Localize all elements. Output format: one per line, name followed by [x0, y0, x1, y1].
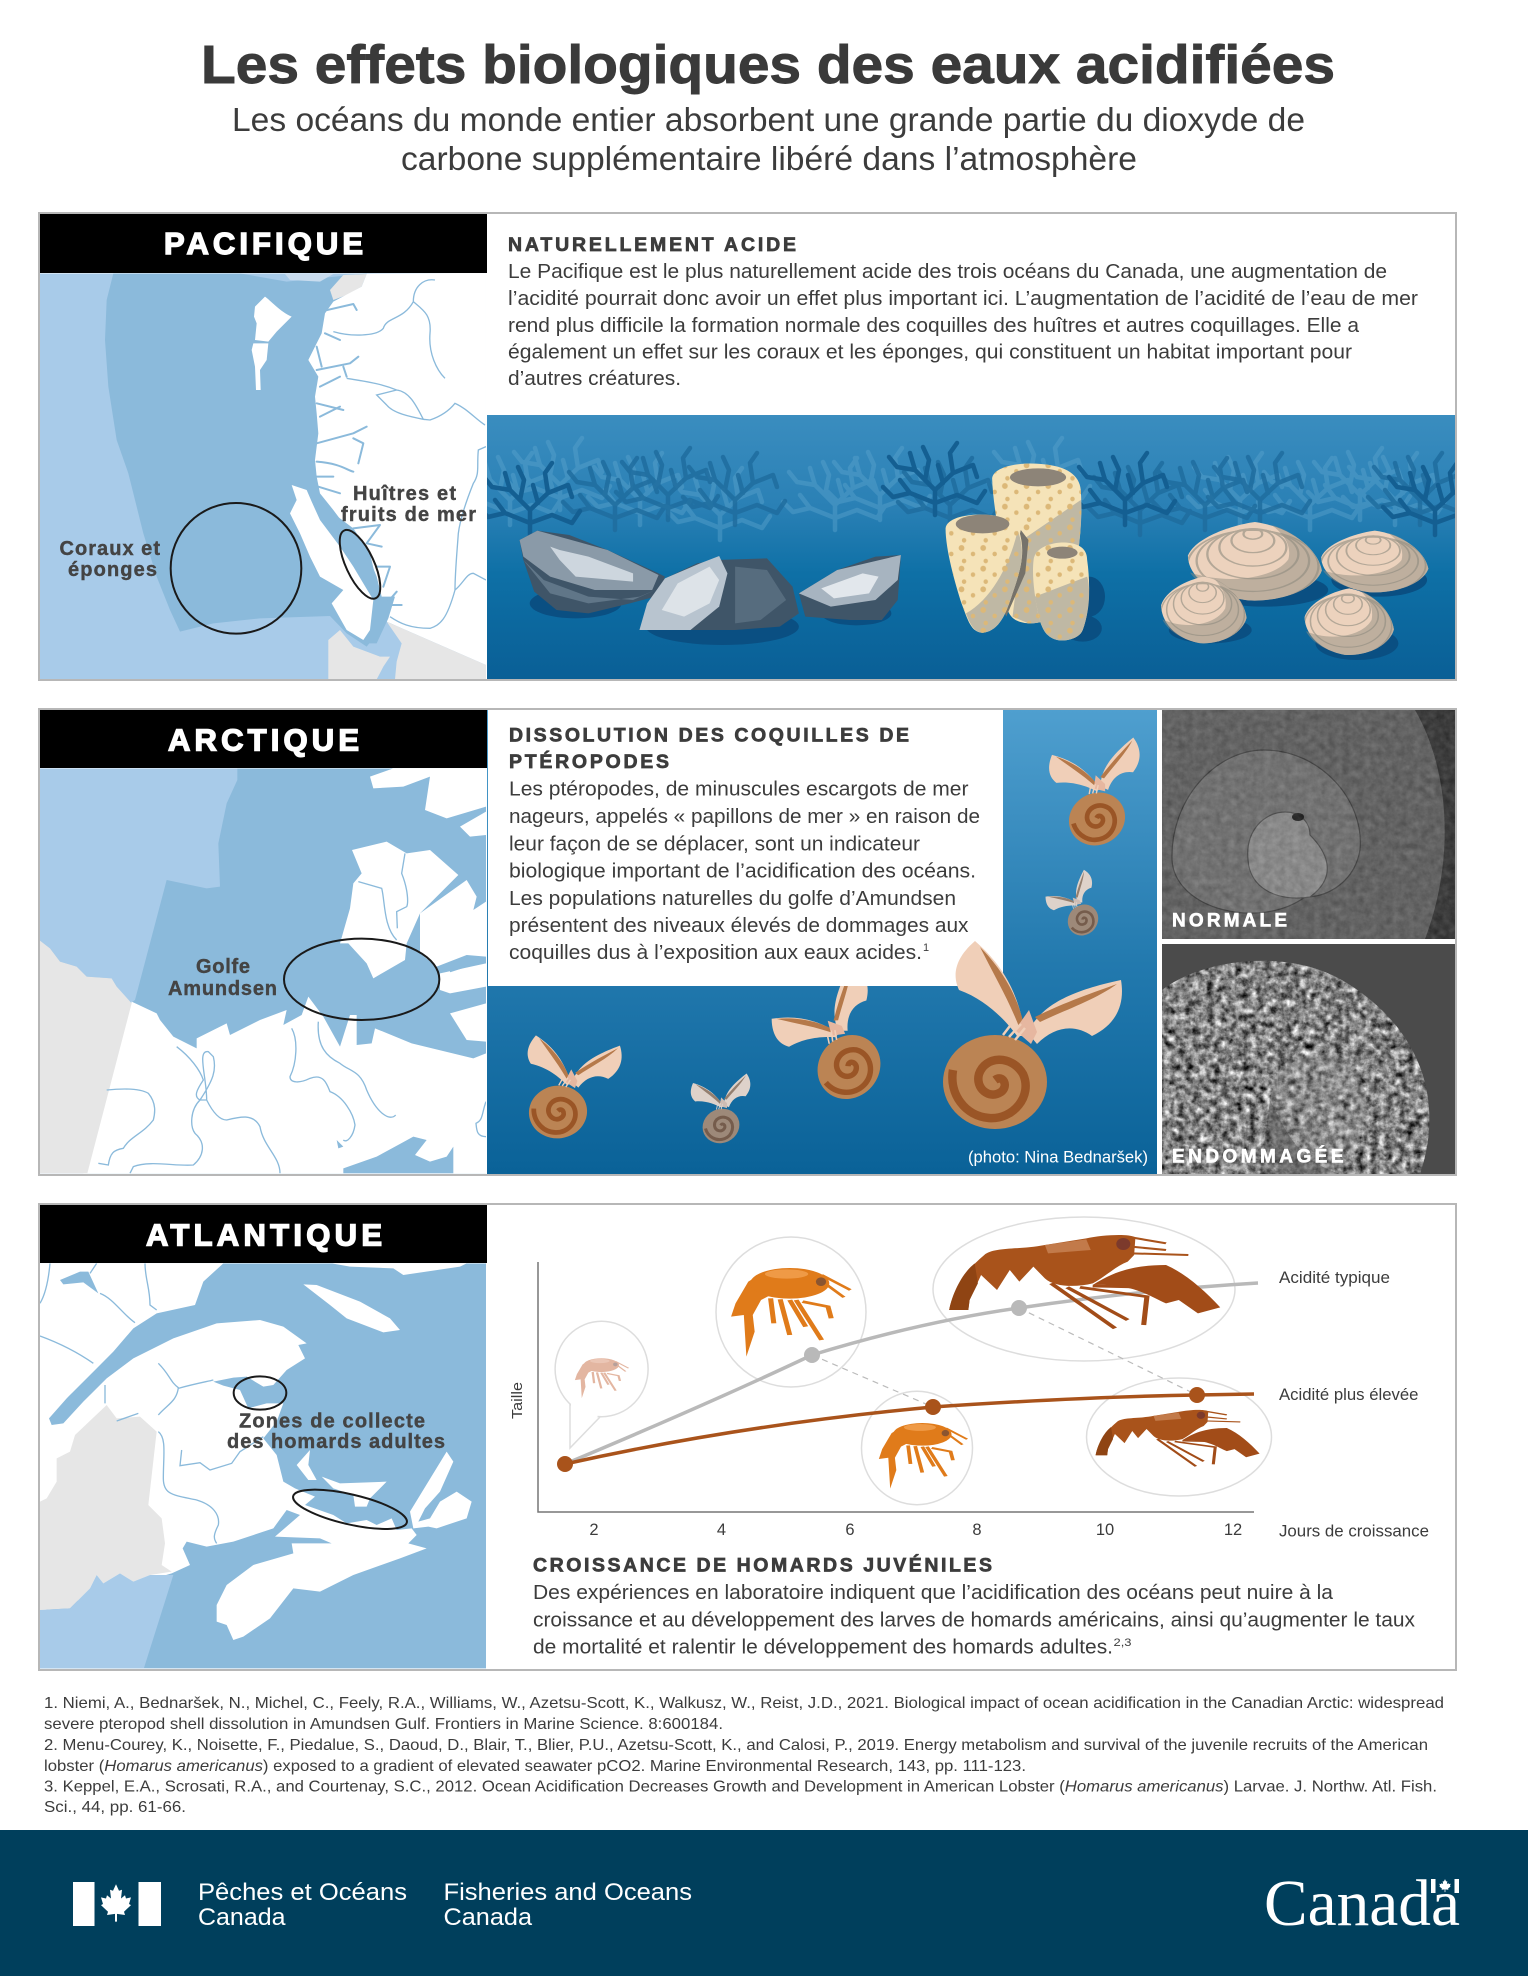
x axis label: Jours de croissance — [1279, 1522, 1429, 1540]
header: PACIFIQUE: PACIFIQUE — [164, 226, 363, 261]
title: Les effets biologiques des eaux acidifiées — [201, 35, 1335, 95]
references: 1. Niemi, A., Bednaršek, N., Michel, C., Feely, R.A., Williams, W., Azetsu-Scott, K., Walkusz, W., Reist, J.D., 2021. Biological impact of ocean acidification in the Canadian Arctic: widespread — [44, 1695, 1444, 1712]
text block: Arctique: nageurs, appelés « papillons de mer » en raison de — [509, 806, 980, 828]
heading: dissolution: DISSOLUTION DES COQUILLES DE — [509, 724, 909, 746]
text block: Arctique: Les ptéropodes, de minuscules escargots de mer — [509, 778, 969, 800]
label: coraux et éponges — [60, 538, 160, 581]
text block: Atlantique: 2,3 — [1114, 1637, 1132, 1649]
line: typical acidity — [565, 1283, 1258, 1464]
dashed connectors — [812, 1308, 1197, 1407]
illustration: pteropods background — [487, 710, 1157, 1174]
heading: naturellement acide: NATURELLEMENT ACIDE — [508, 234, 796, 256]
caption: photo credit: (photo: Nina Bednaršek) — [968, 1148, 1148, 1166]
text block: Arctique: 1 — [923, 942, 929, 954]
label: golfe Amundsen: Golfe — [196, 956, 250, 978]
illustration: oysters, sponges and clams — [458, 415, 1485, 680]
panel border — [39, 1204, 1456, 1670]
heading: dissolution — [509, 724, 909, 773]
label: huîtres et fruits de mer: Huîtres et — [353, 483, 456, 505]
label: huîtres et fruits de mer: fruits de mer — [341, 504, 476, 526]
panel: Arctique — [39, 709, 1456, 1175]
header: ATLANTIQUE — [40, 1205, 487, 1263]
label: huîtres et fruits de mer — [341, 483, 476, 526]
map: Pacific coast — [40, 273, 486, 679]
panel: Atlantique — [39, 1204, 1456, 1670]
map: Atlantic Canada — [40, 1263, 486, 1670]
legend: higher acidity: Acidité plus élevée — [1279, 1386, 1418, 1404]
references: 2. Menu-Courey, K., Noisette, F., Piedalue, S., Daoud, D., Blair, T., Blier, P.U., Azetsu-Scott, K., and Calosi, P., 2019. Energy metabolism and survival of the juvenile recruits of the American — [44, 1737, 1428, 1754]
label: endommagée: ENDOMMAGÉE — [1172, 1146, 1344, 1168]
text panel: pteropods — [488, 710, 1003, 986]
x axis ticks: 8 — [972, 1521, 982, 1539]
references — [44, 1695, 1444, 1816]
bubble: lobster acid — [1086, 1378, 1272, 1496]
x axis ticks: 12 — [1224, 1521, 1242, 1539]
text: department English: Canada — [444, 1904, 532, 1931]
icon: pteropod large — [943, 941, 1122, 1129]
references: severe pteropod shell dissolution in Amundsen Gulf. Frontiers in Marine Science. 8:600184. — [44, 1716, 723, 1733]
icon: pteropod upper right — [1036, 718, 1171, 855]
footer band — [0, 1830, 1528, 1976]
label: normale: NORMALE — [1172, 910, 1287, 932]
chart: lobster growth — [509, 1217, 1429, 1540]
icon: Canadian flag — [73, 1882, 161, 1926]
panel border — [39, 709, 1456, 1175]
legend: typical acidity: Acidité typique — [1279, 1269, 1390, 1287]
subtitle — [232, 102, 1305, 178]
header: ARCTIQUE: ARCTIQUE — [168, 722, 359, 758]
text: department English — [444, 1879, 692, 1931]
references: Sci., 44, pp. 61-66. — [44, 1799, 186, 1816]
text block: Atlantique: croissance et au développement des larves de homards américains, ainsi qu’augmenter le taux — [533, 1610, 1415, 1632]
references: lobster (Homarus americanus ) exposed to a gradient of elevated seawater pCO2. Marine Environmental Research, 143, pp. 111-123. — [44, 1758, 1026, 1775]
text block: Pacifique — [508, 261, 1418, 390]
sponges — [946, 463, 1105, 642]
text block: Pacifique: également un effet sur les coraux et les éponges, qui constituent un habitat important pour — [508, 342, 1352, 364]
text block: Arctique: coquilles dus à l’exposition aux eaux acides. — [509, 942, 922, 964]
text block: Pacifique: l’acidité pourrait donc avoir un effet plus important ici. L’augmentation de l’acidité de l’eau de mer — [508, 288, 1418, 310]
label: golfe Amundsen: Amundsen — [168, 978, 277, 1000]
x axis ticks: 6 — [845, 1521, 855, 1539]
icon: pteropod lower left — [518, 1024, 632, 1142]
references: 3. Keppel, E.A., Scrosati, R.A., and Courtenay, S.C., 2012. Ocean Acidification Decreases Growth and Development in American Lobster ( Homarus americanus ) Larvae. J. Northw. Atl. Fish. — [44, 1778, 1437, 1796]
bubble: lobster typical — [933, 1217, 1235, 1361]
illustration: lobster large — [949, 1235, 1220, 1328]
bubble: juvenile acid — [862, 1391, 972, 1505]
x axis ticks: 2 — [589, 1521, 599, 1539]
map: Amundsen Gulf — [40, 768, 486, 1173]
text block: Atlantique: de mortalité et ralentir le développement des homards adultes. — [533, 1636, 1113, 1658]
panel: Pacifique — [39, 213, 1485, 680]
subtitle: Les océans du monde entier absorbent une grande partie du dioxyde de — [232, 102, 1305, 139]
heading: croissance: CROISSANCE DE HOMARDS JUVÉNILES — [533, 1554, 992, 1576]
text block: Arctique: Les populations naturelles du golfe d’Amundsen — [509, 888, 956, 910]
icon: pteropod small lower — [683, 1061, 770, 1149]
text block: Pacifique: Le Pacifique est le plus naturellement acide des trois océans du Canada, une augmentation de — [508, 261, 1387, 283]
header: PACIFIQUE — [40, 214, 487, 273]
heading: dissolution: PTÉROPODES — [509, 750, 669, 773]
text: department French: Pêches et Océans — [198, 1879, 407, 1906]
bubble: larva — [555, 1321, 648, 1448]
oysters — [520, 531, 901, 645]
text block: Arctique: présentent des niveaux élevés de dommages aux — [509, 915, 968, 937]
text block: Arctique — [509, 778, 980, 964]
text block: Pacifique: rend plus difficile la formation normale des coquilles des huîtres et autres coquillages. Elle a — [508, 315, 1360, 337]
icon: pteropod middle — [758, 947, 924, 1112]
x axis ticks: 4 — [717, 1521, 726, 1539]
text block: Arctique: biologique important de l’acidification des océans. — [509, 860, 976, 882]
photo: damaged shell — [1162, 944, 1455, 1174]
clams — [1161, 522, 1428, 660]
text: department French: Canada — [198, 1904, 286, 1931]
photo: normal shell — [1162, 710, 1455, 939]
wordmark: Canada: Canada — [1264, 1867, 1460, 1940]
bubble: juvenile typical — [716, 1237, 866, 1387]
label: coraux et éponges: Coraux et — [60, 538, 160, 560]
text: department French — [198, 1879, 407, 1931]
points — [557, 1300, 1205, 1472]
header: ARCTIQUE — [40, 710, 487, 768]
text block: Atlantique — [533, 1582, 1415, 1658]
label: zones de collecte: Zones de collecte — [239, 1410, 425, 1432]
label: coraux et éponges: éponges — [68, 559, 157, 581]
label: golfe Amundsen — [168, 956, 277, 1000]
y axis label: Taille — [509, 1382, 526, 1419]
x axis ticks: 10 — [1096, 1521, 1114, 1539]
text block: Arctique: leur façon de se déplacer, sont un indicateur — [509, 834, 920, 856]
line: higher acidity — [565, 1394, 1254, 1464]
x axis ticks — [589, 1521, 1242, 1539]
subtitle: carbone supplémentaire libéré dans l’atmosphère — [401, 141, 1137, 178]
text: department English: Fisheries and Oceans — [444, 1879, 692, 1906]
text block: Pacifique: d’autres créatures. — [508, 368, 681, 390]
text block: Atlantique: Des expériences en laboratoire indiquent que l’acidification des océans peut nuire à la — [533, 1582, 1334, 1604]
panel border — [39, 213, 1456, 680]
icon: pteropod small upper — [1039, 862, 1119, 942]
header: ATLANTIQUE: ATLANTIQUE — [146, 1218, 382, 1252]
label: zones de collecte — [227, 1410, 445, 1453]
label: zones de collecte: des homards adultes — [227, 1431, 445, 1453]
chart axes — [538, 1262, 1254, 1512]
